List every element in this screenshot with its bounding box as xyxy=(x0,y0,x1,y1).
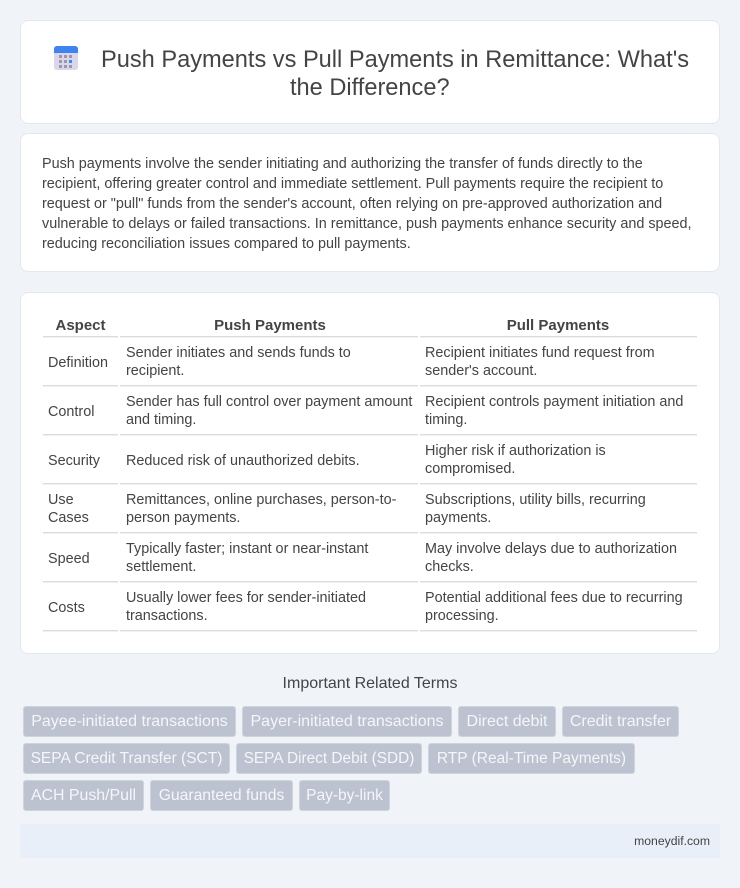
row: security: Security xyxy=(48,453,100,469)
chip: SEPA Credit Transfer (SCT) xyxy=(31,750,222,767)
chip xyxy=(562,706,679,737)
table header xyxy=(55,317,609,334)
row: control: timing. xyxy=(425,412,467,428)
chip: Credit transfer xyxy=(570,713,671,730)
row: definition: sender's account. xyxy=(425,363,537,379)
table header: Push Payments xyxy=(214,317,326,334)
intro text panel: vulnerable to delays or failed transactions. In remittance, push payments enhance security and speed, xyxy=(42,216,692,232)
row: costs: processing. xyxy=(425,608,499,624)
row: speed: Typically faster; instant or near-instant xyxy=(126,541,368,557)
row: security xyxy=(48,443,606,477)
row: speed: May involve delays due to authorization xyxy=(425,541,677,557)
row: control: and timing. xyxy=(126,412,196,428)
row: definition: Sender initiates and sends funds to xyxy=(126,345,351,361)
chip xyxy=(23,780,144,811)
heading: Push Payments vs Pull Payments in Remittance: What's xyxy=(101,47,689,73)
intro text panel: recipient, offering greater control and immediate settlement. Pull payments require the recipient to xyxy=(42,176,663,192)
chip xyxy=(458,706,556,737)
row: security: Reduced risk of unauthorized debits. xyxy=(126,453,360,469)
table header: Pull Payments xyxy=(507,317,609,334)
row: control xyxy=(48,394,683,428)
chip: Direct debit xyxy=(467,713,547,730)
chip xyxy=(299,780,390,811)
intro text panel: Push payments involve the sender initiating and authorizing the transfer of funds directly to the xyxy=(42,156,643,172)
row: definition xyxy=(48,345,655,379)
row: security: compromised. xyxy=(425,461,515,477)
chip: RTP (Real-Time Payments) xyxy=(437,750,626,767)
row: definition: Recipient initiates fund request from xyxy=(425,345,655,361)
chip xyxy=(23,706,236,737)
chip: Payee-initiated transactions xyxy=(31,713,228,730)
chip xyxy=(236,743,422,774)
row: use cases: Subscriptions, utility bills, recurring xyxy=(425,492,646,508)
icon: calendar xyxy=(54,46,78,70)
heading: the Difference? xyxy=(290,75,450,101)
row: use cases: Use xyxy=(48,492,74,508)
chip xyxy=(150,780,293,811)
row: security: Higher risk if authorization is xyxy=(425,443,606,459)
intro text panel: reducing reconciliation issues compared to pull payments. xyxy=(42,236,411,252)
row: speed: settlement. xyxy=(126,559,196,575)
row: definition: Definition xyxy=(48,355,108,371)
footer bar: moneydif.com xyxy=(634,834,710,848)
row: speed xyxy=(48,541,677,575)
chip xyxy=(428,743,635,774)
row: control: Control xyxy=(48,404,94,420)
intro text panel xyxy=(20,133,720,272)
title card xyxy=(20,20,720,124)
row: costs: Costs xyxy=(48,600,85,616)
comparison table panel xyxy=(20,292,720,654)
row: use cases: Remittances, online purchases, person-to- xyxy=(126,492,396,508)
chip: Payer-initiated transactions xyxy=(250,713,443,730)
row: costs: Usually lower fees for sender-initiated xyxy=(126,590,366,606)
row: use cases: person payments. xyxy=(126,510,240,526)
chip: Pay-by-link xyxy=(306,787,383,804)
row: control: Recipient controls payment initiation and xyxy=(425,394,683,410)
related terms chips xyxy=(23,706,679,811)
chip xyxy=(242,706,452,737)
row: costs xyxy=(48,590,683,624)
row: definition: recipient. xyxy=(126,363,184,379)
chip: ACH Push/Pull xyxy=(31,787,136,804)
footer bar xyxy=(20,824,720,858)
heading xyxy=(101,47,689,101)
row: use cases: Cases xyxy=(48,510,89,526)
chip xyxy=(23,743,230,774)
intro text panel: request or "pull" funds from the sender's account, often relying on pre-approved authorization and xyxy=(42,196,662,212)
related terms heading: Important Related Terms xyxy=(283,675,457,692)
chip: SEPA Direct Debit (SDD) xyxy=(244,750,414,767)
row: speed: checks. xyxy=(425,559,474,575)
row: use cases xyxy=(48,492,646,526)
row: costs: transactions. xyxy=(126,608,208,624)
row: costs: Potential additional fees due to recurring xyxy=(425,590,683,606)
row: control: Sender has full control over payment amount xyxy=(126,394,412,410)
row: use cases: payments. xyxy=(425,510,491,526)
table header: Aspect xyxy=(55,317,106,334)
chip: Guaranteed funds xyxy=(159,787,284,804)
row: speed: Speed xyxy=(48,551,90,567)
